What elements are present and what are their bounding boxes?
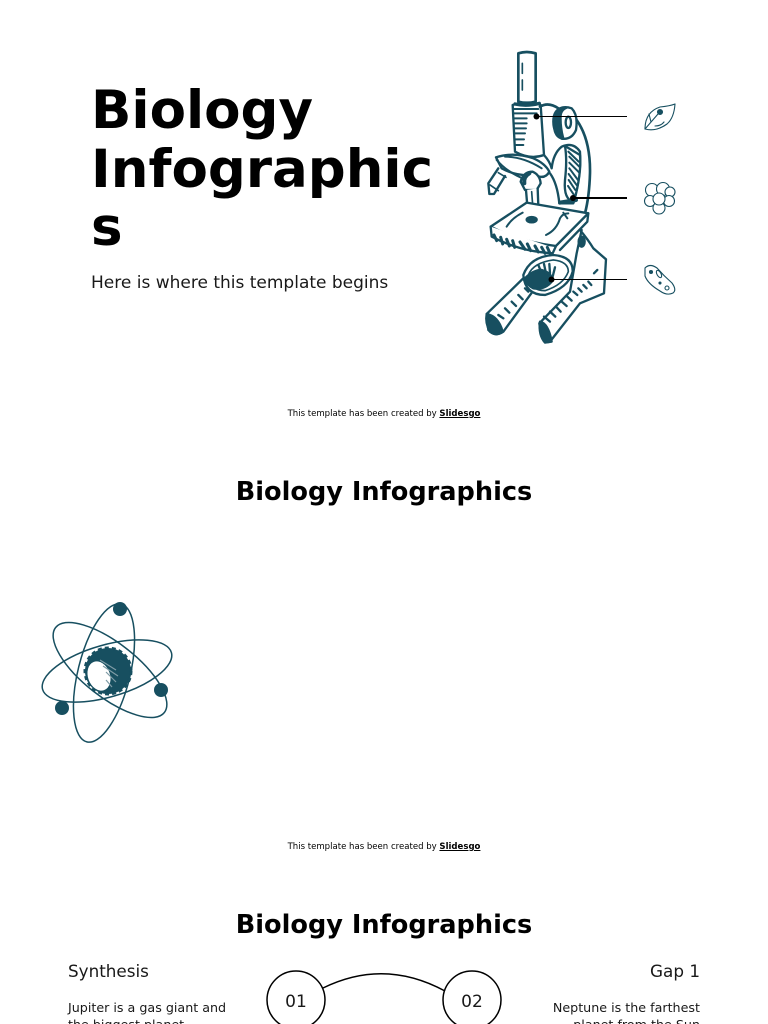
icon: paramecium bbox=[645, 266, 675, 294]
text: Gap 1 description bbox=[553, 1000, 700, 1024]
arrow arc between circles bbox=[323, 974, 445, 991]
left foot bbox=[487, 277, 535, 334]
electron orbits bbox=[35, 628, 179, 714]
base pillar bbox=[539, 230, 606, 342]
icon: cell cluster bbox=[644, 182, 675, 214]
text: Synthesis description bbox=[67, 1000, 226, 1024]
nosepiece bbox=[496, 155, 549, 177]
title: Infographic bbox=[91, 138, 433, 200]
eyepiece tube bbox=[518, 52, 536, 103]
stage bbox=[491, 203, 588, 246]
label: Synthesis: Synthesis bbox=[68, 961, 149, 981]
credit line: first slide: This template has been created by Slidesgo bbox=[288, 409, 480, 419]
title bbox=[91, 80, 433, 258]
callout line: top bbox=[534, 114, 627, 120]
mirror bbox=[523, 255, 573, 295]
label: Gap 1: Gap 1 bbox=[650, 961, 700, 981]
heading: third slide: Biology Infographics bbox=[236, 910, 532, 940]
subtitle: Here is where this template begins bbox=[91, 273, 388, 293]
atom illustration bbox=[35, 598, 181, 748]
arm bbox=[540, 105, 590, 213]
cycle diagram: circle 02 bbox=[443, 971, 501, 1024]
title: Biology bbox=[91, 80, 313, 141]
cycle diagram: circle 01 bbox=[267, 971, 325, 1024]
heading: second slide: Biology Infographics bbox=[236, 477, 532, 507]
text: Synthesis description: Jupiter is a gas giant and bbox=[68, 1000, 226, 1015]
stage clip and post bbox=[521, 172, 541, 190]
microscope illustration bbox=[486, 52, 606, 343]
text: Gap 1 description: Neptune is the farthest bbox=[553, 1000, 700, 1015]
electrons bbox=[113, 602, 127, 616]
focus knob bbox=[553, 107, 577, 139]
callout line: middle bbox=[570, 195, 627, 201]
credit line: second slide: This template has been created by Slidesgo bbox=[288, 842, 480, 852]
title: s bbox=[91, 197, 123, 258]
cycle diagram: circle 02: 02 bbox=[461, 992, 483, 1012]
nucleus bbox=[85, 648, 131, 694]
callout line: bottom bbox=[548, 276, 627, 282]
icon: leaf cell bbox=[645, 104, 675, 130]
body tube bbox=[513, 102, 544, 157]
cycle diagram: circle 01: 01 bbox=[285, 992, 307, 1012]
